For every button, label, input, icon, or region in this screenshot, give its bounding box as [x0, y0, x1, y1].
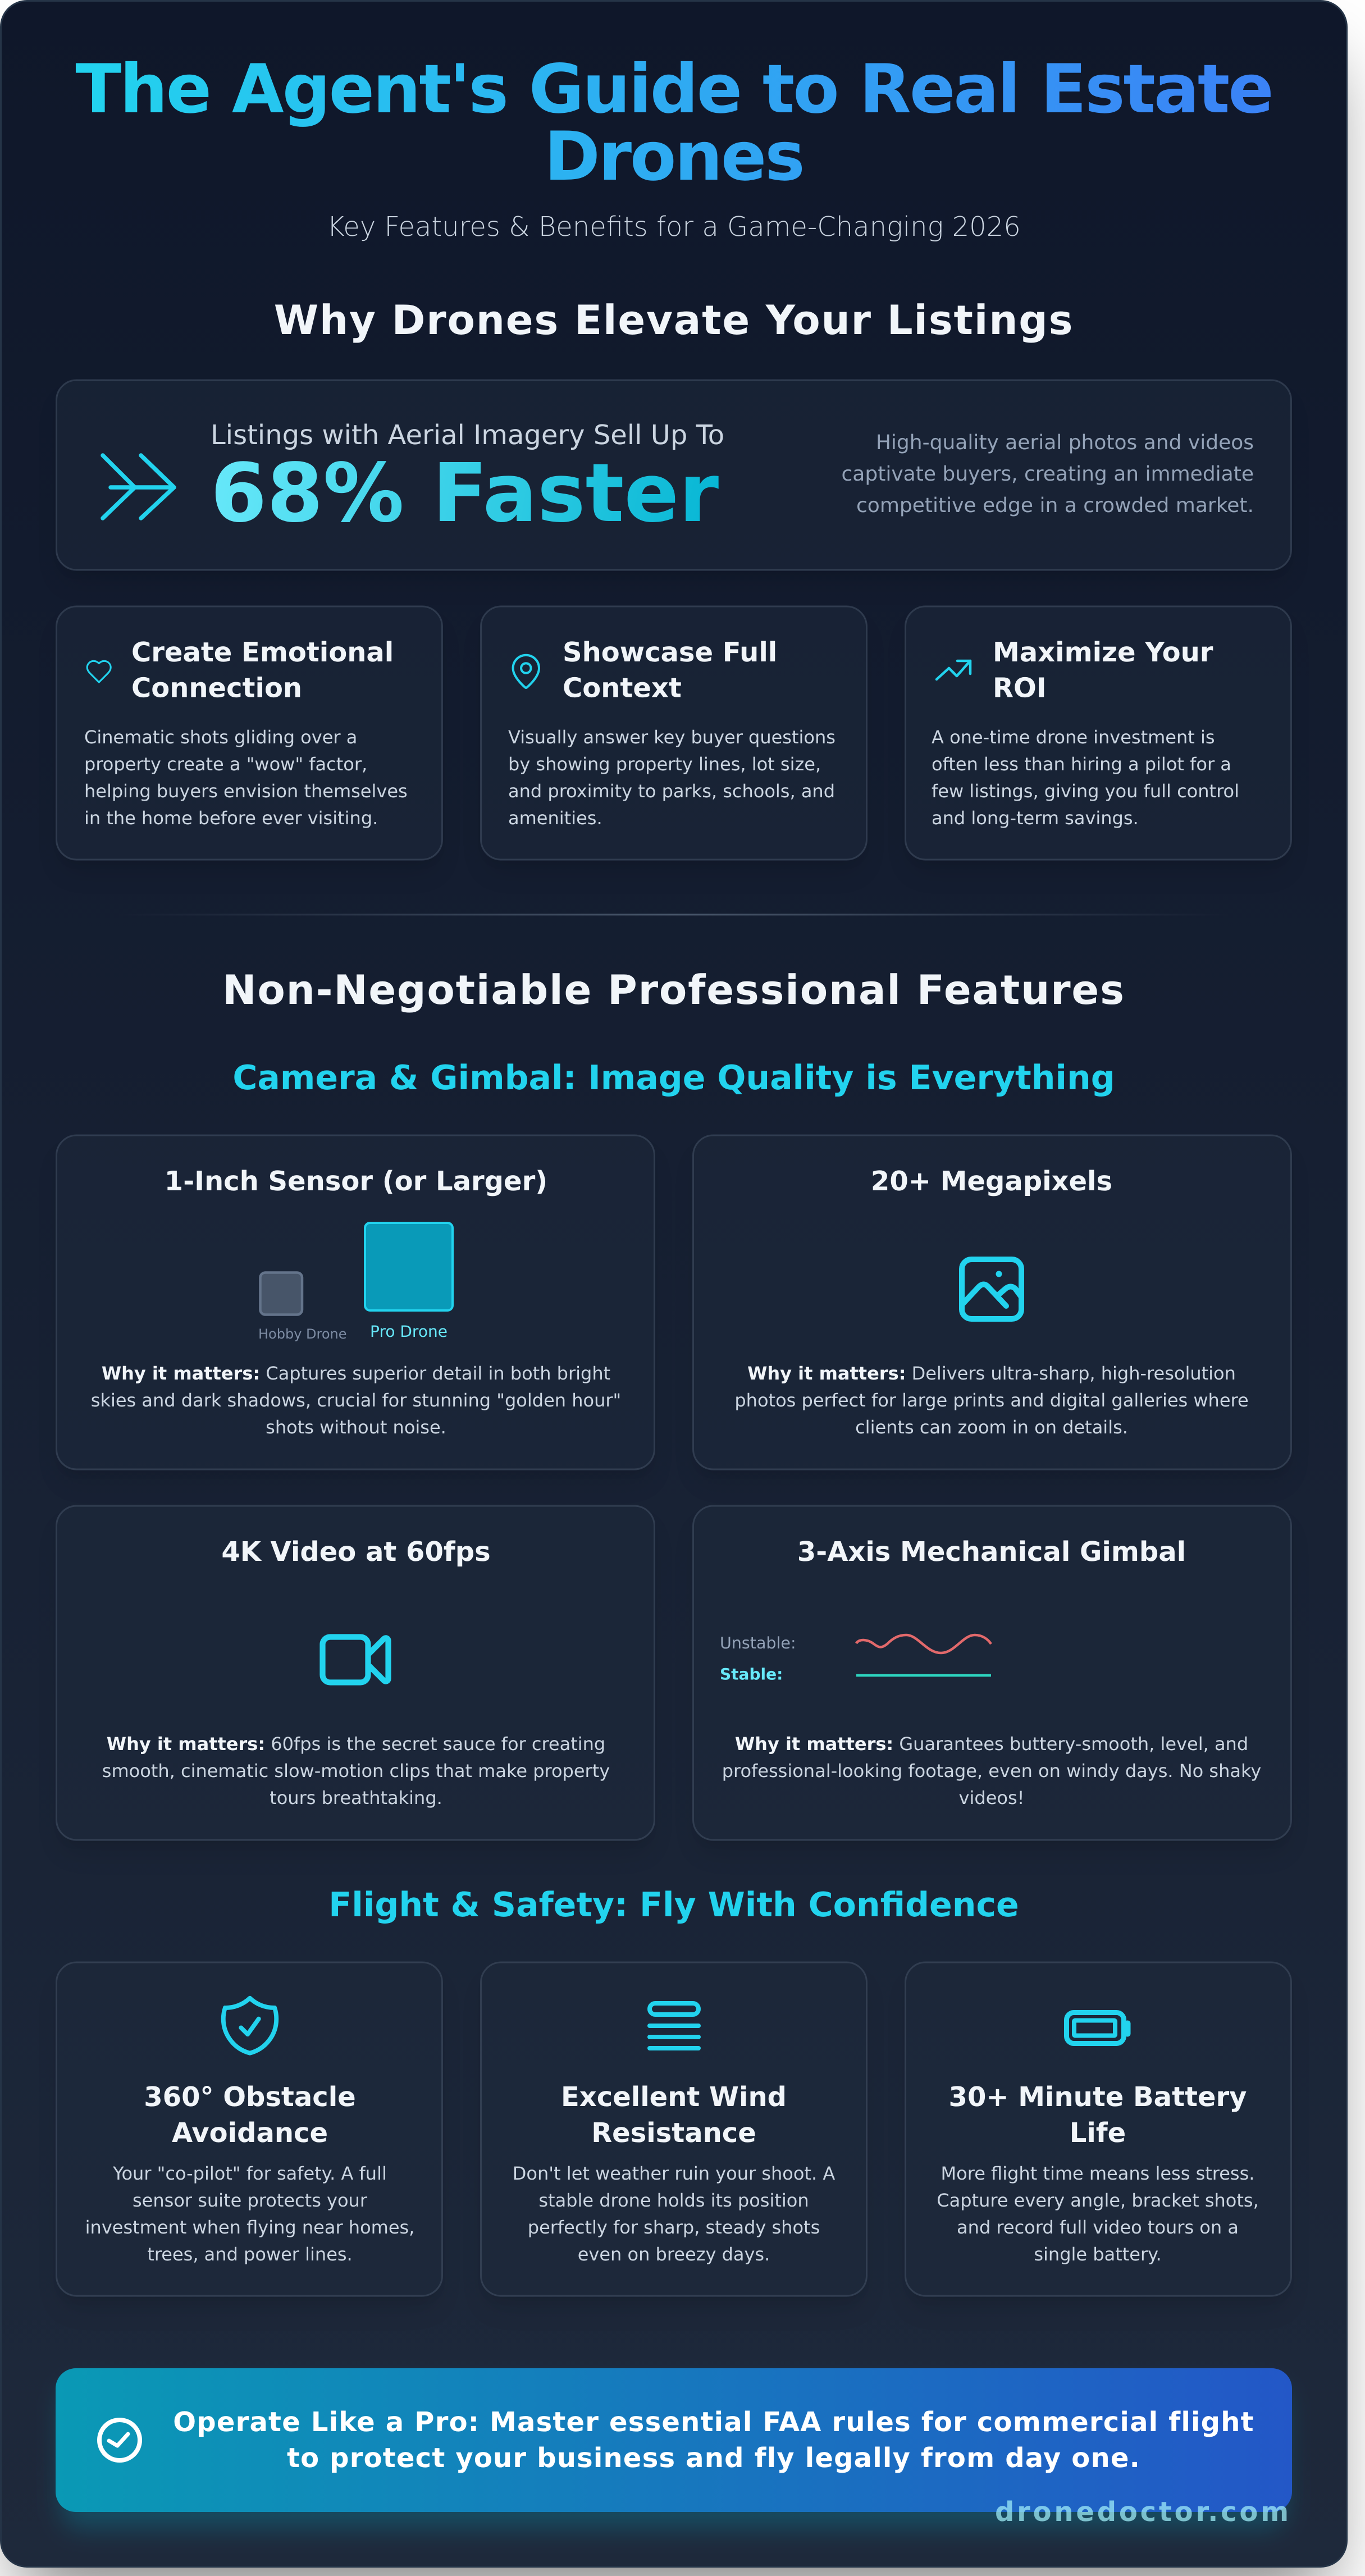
card heading: Excellent Wind — [561, 2081, 787, 2113]
why it matters — [734, 1363, 1249, 1438]
chart: sensor size comparison: Hobby Drone — [258, 1326, 347, 1342]
card heading: 360° Obstacle — [144, 2081, 356, 2113]
card text: investment when flying near homes, — [85, 2217, 414, 2238]
callout text: Operate Like a Pro: Master essential FAA rules for commercial flight — [173, 2406, 1254, 2438]
subheading: camera and gimbal: Camera & Gimbal: Image Quality is Everything — [232, 1058, 1115, 1098]
icon: double arrow — [103, 455, 174, 518]
panel: 3-axis gimbal — [693, 1506, 1291, 1840]
card heading: 4K Video at 60fps — [221, 1536, 491, 1568]
heading: why drones: Why Drones Elevate Your Listings — [274, 296, 1074, 344]
chart: unstable vs stable lines: Unstable: — [720, 1634, 796, 1652]
card heading: ROI — [993, 673, 1047, 704]
panel: create emotional connection — [56, 606, 442, 860]
card text: Visually answer key buyer questions — [508, 727, 836, 748]
card text: perfectly for sharp, steady shots — [528, 2217, 820, 2238]
icon: video camera — [322, 1637, 389, 1682]
card text: few listings, giving you full control — [932, 780, 1239, 802]
card heading — [949, 2081, 1247, 2149]
card text: trees, and power lines. — [147, 2244, 353, 2265]
icon: wind — [650, 2003, 699, 2048]
brand watermark: dronedoctor.com — [995, 2496, 1291, 2528]
card heading: 1-Inch Sensor (or Larger) — [165, 1166, 547, 1197]
heading: professional features: Non-Negotiable Professional Features — [222, 966, 1125, 1013]
card text: A one-time drone investment is — [932, 727, 1215, 748]
card heading — [561, 2081, 787, 2149]
icon: trending up — [937, 661, 970, 679]
card text: sensor suite protects your — [133, 2190, 368, 2211]
chart: unstable vs stable lines — [720, 1634, 991, 1683]
title: The Agent's Guide to Real Estate — [75, 51, 1272, 129]
card text: and long-term savings. — [932, 807, 1139, 829]
why it matters: Why it matters: Delivers ultra-sharp, high-resolution — [747, 1363, 1236, 1384]
card heading: Connection — [131, 673, 302, 704]
card text: and record full video tours on a — [957, 2217, 1239, 2238]
why it matters: skies and dark shadows, crucial for stunning "golden hour" — [91, 1390, 621, 1411]
why it matters — [102, 1733, 610, 1808]
title: Drones — [544, 118, 804, 196]
icon: image — [962, 1259, 1021, 1319]
hero description: High-quality aerial photos and videos — [876, 431, 1254, 454]
card text: Don't let weather ruin your shoot. A — [513, 2163, 835, 2184]
title — [75, 51, 1272, 196]
callout: operate like a pro — [56, 2368, 1292, 2529]
why it matters: Why it matters: 60fps is the secret sauce for creating — [107, 1733, 605, 1755]
card text: Capture every angle, bracket shots, — [937, 2190, 1259, 2211]
card text: amenities. — [508, 807, 602, 829]
panel: obstacle avoidance — [56, 1962, 442, 2296]
card heading: Maximize Your — [993, 637, 1213, 668]
card text: even on breezy days. — [578, 2244, 770, 2265]
panel: showcase full context — [481, 606, 867, 860]
hero description: competitive edge in a crowded market. — [856, 494, 1254, 517]
why it matters: shots without noise. — [266, 1417, 446, 1438]
card heading: Avoidance — [172, 2117, 328, 2149]
chart: sensor size comparison — [258, 1223, 453, 1342]
card text: Your "co-pilot" for safety. A full — [112, 2163, 387, 2184]
card heading: Life — [1070, 2117, 1126, 2149]
card heading: 20+ Megapixels — [871, 1166, 1112, 1197]
card text: single battery. — [1034, 2244, 1162, 2265]
chart: unstable vs stable lines: Stable: — [720, 1665, 783, 1683]
icon: shield check — [223, 1998, 276, 2053]
subtitle: Key Features & Benefits for a Game-Changing 2026 — [327, 211, 1021, 243]
card text — [84, 727, 408, 829]
why it matters: Why it matters: Guarantees buttery-smooth, level, and — [735, 1733, 1248, 1755]
card heading — [144, 2081, 356, 2149]
why it matters — [722, 1733, 1261, 1808]
why it matters — [91, 1363, 621, 1438]
card text — [513, 2163, 835, 2265]
card text: helping buyers envision themselves — [84, 780, 408, 802]
card text: by showing property lines, lot size, — [508, 753, 821, 775]
panel: 20+ megapixels — [693, 1135, 1291, 1469]
why it matters: Why it matters: Captures superior detail in both bright — [102, 1363, 610, 1384]
card text: stable drone holds its position — [538, 2190, 809, 2211]
card text: in the home before ever visiting. — [84, 807, 378, 829]
card heading: 3-Axis Mechanical Gimbal — [797, 1536, 1186, 1568]
card heading — [563, 637, 777, 704]
card text — [85, 2163, 414, 2265]
icon: check circle — [99, 2420, 140, 2460]
card heading: 30+ Minute Battery — [949, 2081, 1247, 2113]
hero description — [842, 431, 1254, 517]
icon: heart — [87, 661, 111, 682]
card text: More flight time means less stress. — [941, 2163, 1254, 2184]
card text: often less than hiring a pilot for a — [932, 753, 1231, 775]
panel: hero statistic — [56, 380, 1291, 570]
panel: wind resistance — [481, 1962, 867, 2296]
card heading: Resistance — [591, 2117, 756, 2149]
why it matters: smooth, cinematic slow-motion clips that make property — [102, 1760, 610, 1782]
why it matters: professional-looking footage, even on windy days. No shaky — [722, 1760, 1261, 1782]
callout text — [173, 2406, 1254, 2474]
card heading — [993, 637, 1213, 704]
panel: 1-inch sensor — [56, 1135, 655, 1469]
icon: battery — [1067, 2012, 1127, 2044]
card text: and proximity to parks, schools, and — [508, 780, 835, 802]
hero stat: 68% Faster — [211, 446, 719, 540]
card heading: Context — [563, 673, 682, 704]
subheading: flight and safety: Flight & Safety: Fly With Confidence — [328, 1885, 1019, 1925]
why it matters: videos! — [959, 1787, 1024, 1808]
card text — [508, 727, 836, 829]
chart: sensor size comparison: Pro Drone — [370, 1322, 448, 1341]
why it matters: photos perfect for large prints and digital galleries where — [734, 1390, 1249, 1411]
panel: 4k video — [56, 1506, 655, 1840]
icon: map pin — [513, 655, 539, 688]
callout text: to protect your business and fly legally from day one. — [287, 2442, 1140, 2474]
card heading — [131, 637, 394, 704]
why it matters: clients can zoom in on details. — [855, 1417, 1128, 1438]
hero label: Listings with Aerial Imagery Sell Up To — [211, 419, 724, 451]
card text: Cinematic shots gliding over a — [84, 727, 357, 748]
card heading: Showcase Full — [563, 637, 777, 668]
hero description: captivate buyers, creating an immediate — [842, 463, 1254, 486]
card text: property create a "wow" factor, — [84, 753, 367, 775]
panel: maximize your roi — [905, 606, 1291, 860]
card text — [937, 2163, 1259, 2265]
card text — [932, 727, 1239, 829]
card heading: Create Emotional — [131, 637, 394, 668]
why it matters: tours breathtaking. — [270, 1787, 442, 1808]
panel: battery life — [905, 1962, 1291, 2296]
